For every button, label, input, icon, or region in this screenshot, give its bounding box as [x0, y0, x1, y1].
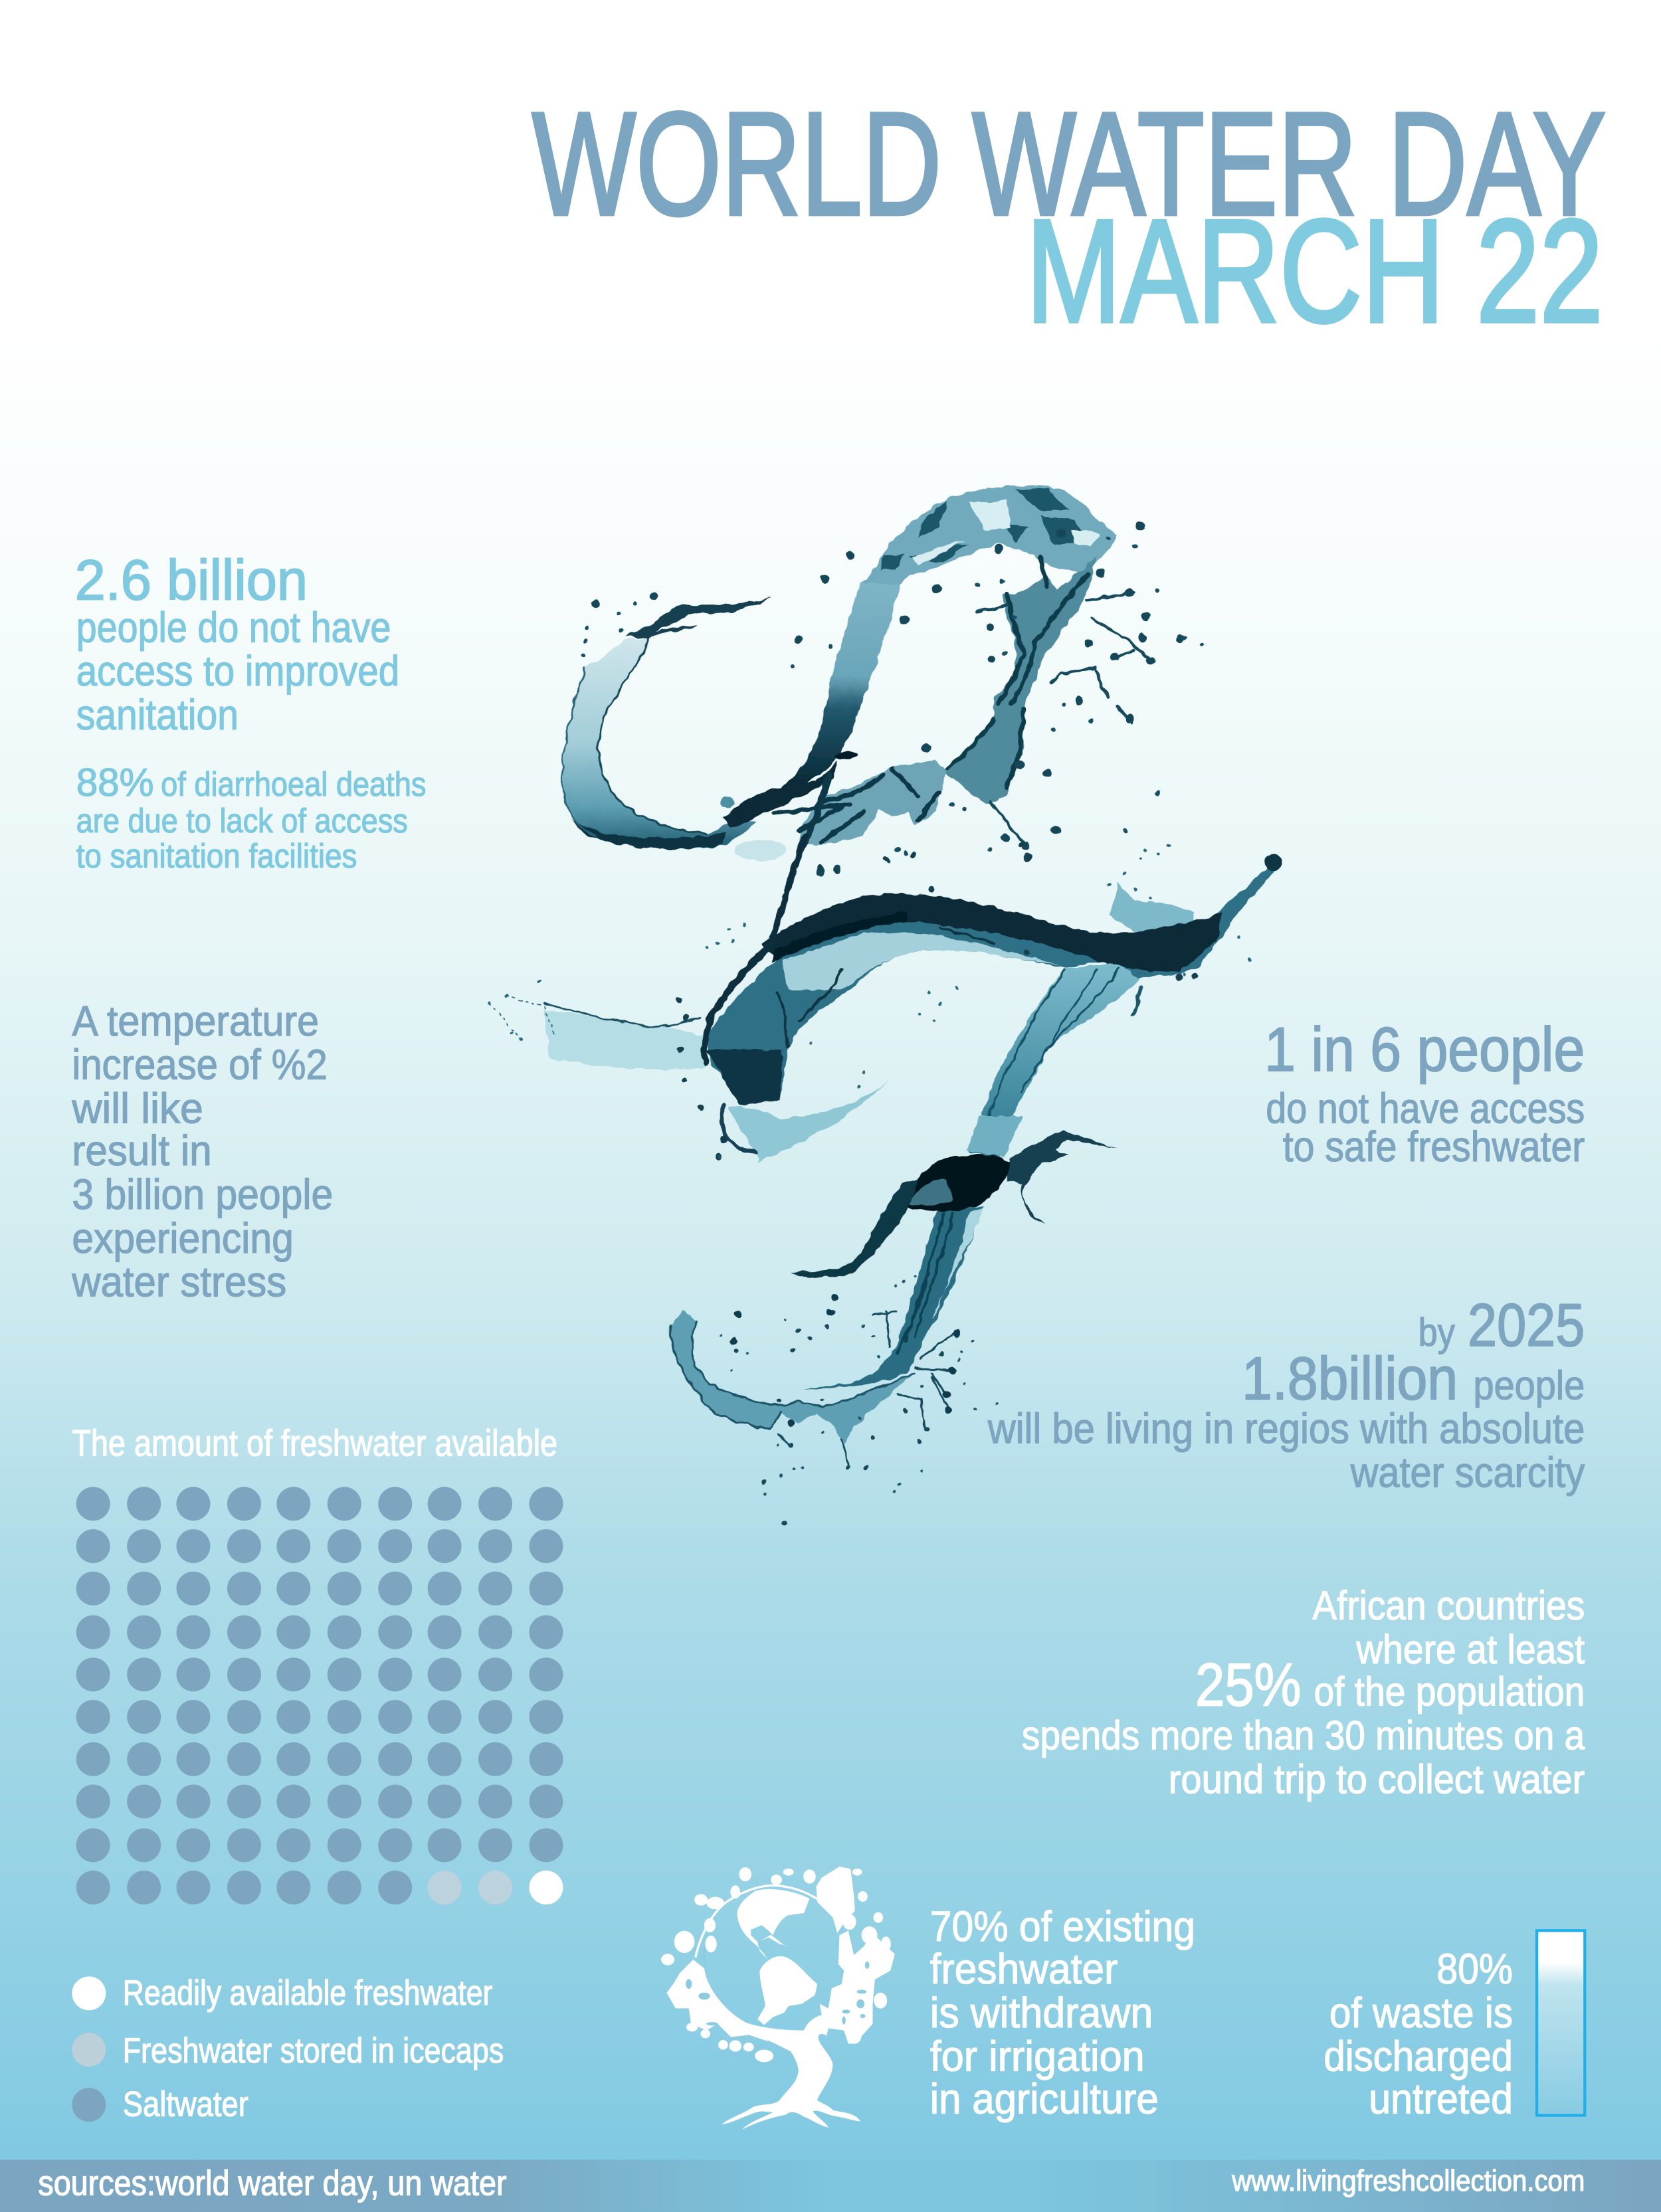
icon: tree with globe: [661, 1867, 895, 2130]
stat: temperature increase: water stress: [71, 1258, 286, 1306]
tree trunk and roots: [722, 2015, 860, 2130]
canopy branch arc: [696, 1885, 822, 1958]
stat: temperature increase: increase of %2: [72, 1041, 328, 1089]
stat: safe freshwater: 1 in 6 people: [1264, 1014, 1585, 1084]
stat: sanitation: [75, 549, 426, 875]
stat: temperature increase: A temperature: [72, 997, 319, 1045]
stat: agriculture withdrawal: freshwater: [930, 1945, 1118, 1993]
sanitation description: access to improved: [76, 647, 399, 695]
stat: African countries: [1022, 1583, 1585, 1802]
stat: water scarcity by 2025: [987, 1291, 1585, 1496]
stat: temperature increase: result in: [72, 1127, 212, 1174]
continent: South America: [757, 1956, 817, 2025]
stat: untreated waste: of waste is: [1329, 1989, 1513, 2037]
continent: Caribbean: [761, 1935, 791, 1946]
legend item: readily available: Readily available freshwater: [123, 1974, 492, 2013]
legend item: icecaps: Freshwater stored in icecaps: [123, 2031, 504, 2071]
diarrhoeal deaths statistic: [76, 760, 426, 875]
dot chart: freshwater availability: [76, 1487, 563, 1904]
stat: untreated waste: 80%: [1436, 1945, 1513, 1993]
stat: African countries: of the population: [1314, 1669, 1585, 1715]
diarrhoeal deaths statistic: are due to lack of access: [76, 802, 408, 840]
left branch foliage: [666, 1960, 769, 2041]
stat: temperature increase: 3 billion people: [72, 1170, 333, 1218]
top right leaf cluster: [816, 1867, 855, 1933]
stat: agriculture withdrawal: [930, 1902, 1195, 2122]
stat: water scarcity by 2025: water scarcity: [1350, 1448, 1585, 1496]
continent: North America: [737, 1889, 809, 1960]
stat: untreated waste: [1323, 1945, 1513, 2122]
legend item: saltwater: Saltwater: [123, 2085, 248, 2124]
diarrhoeal deaths statistic: to sanitation facilities: [76, 837, 357, 875]
loose leaves: [661, 1867, 891, 2062]
diarrhoeal deaths statistic: of diarrhoeal deaths: [161, 765, 426, 803]
stat: African countries: African countries: [1312, 1583, 1585, 1629]
stat: untreated waste: untreted: [1369, 2074, 1513, 2122]
stat: safe freshwater: do not have access: [1266, 1084, 1585, 1132]
sanitation description: people do not have: [76, 603, 391, 651]
water splash illustration forming the number 7: [490, 486, 1282, 1522]
stat: temperature increase: [71, 997, 333, 1306]
title: [532, 82, 1606, 353]
footer: sources: sources:world water day, un water: [38, 2164, 507, 2203]
footer band: [0, 2160, 1661, 2212]
stat: temperature increase: experiencing: [72, 1214, 294, 1262]
right branch foliage: [819, 1931, 895, 2044]
stat: African countries: 25%: [1195, 1651, 1301, 1719]
stat: agriculture withdrawal: in agriculture: [930, 2074, 1159, 2122]
splash: lower stem, knot and bottom curl: [670, 1116, 1118, 1522]
stat: untreated waste: discharged: [1323, 2033, 1513, 2080]
sanitation description: [76, 603, 399, 739]
stat: agriculture withdrawal: 70% of existing: [930, 1902, 1195, 1950]
diarrhoeal deaths statistic: 88%: [76, 760, 154, 804]
stat: water scarcity by 2025: 2025: [1468, 1291, 1585, 1359]
sanitation description: sanitation: [76, 691, 239, 739]
stat: water scarcity by 2025: will be living in regios with absolute: [987, 1405, 1585, 1453]
leaf gaps: [686, 1945, 870, 2040]
legend item: saltwater: [72, 2085, 248, 2124]
footer: website: www.livingfreshcollection.com: [1231, 2165, 1585, 2197]
stat: agriculture withdrawal: for irrigation: [930, 2033, 1145, 2080]
stat: agriculture withdrawal: is withdrawn: [930, 1989, 1153, 2037]
stat: African countries: round trip to collect water: [1169, 1756, 1585, 1802]
sanitation headline number: 2.6 billion: [75, 549, 308, 612]
stat: safe freshwater: to safe freshwater: [1283, 1123, 1585, 1170]
stat: water scarcity by 2025: 1.8billion: [1242, 1345, 1458, 1413]
stat: temperature increase: will like: [71, 1084, 203, 1132]
dot chart heading: The amount of freshwater available: [72, 1423, 557, 1464]
splash: upper curl and arch: [562, 486, 1202, 890]
legend: [72, 1974, 504, 2124]
stat: water scarcity by 2025: people: [1474, 1363, 1585, 1409]
gauge bar: 80 percent: [1537, 1930, 1585, 2116]
stat: water scarcity by 2025: by: [1418, 1310, 1455, 1354]
stat: safe freshwater: [1264, 1014, 1585, 1170]
stat: African countries: where at least: [1355, 1627, 1585, 1673]
stat: African countries: spends more than 30 minutes on a: [1022, 1712, 1585, 1758]
splash: main bar of the seven: [490, 837, 1282, 1162]
